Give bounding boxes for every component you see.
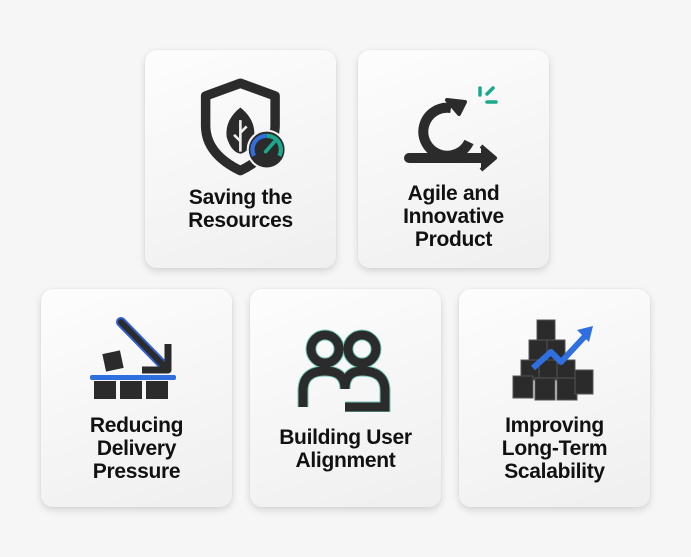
card: Agile and Innovative Product: [358, 50, 549, 268]
icon: cube stack with growth arrow: [512, 320, 594, 400]
text: Delivery: [97, 437, 176, 460]
text: Improving: [505, 414, 604, 437]
text: Alignment: [296, 449, 395, 472]
text: [90, 414, 183, 483]
card: Improving Long-Term Scalability: [459, 289, 650, 507]
icon: agile loop arrow: [404, 86, 498, 172]
text: Building User: [279, 426, 412, 449]
text: Pressure: [93, 460, 180, 483]
text: Long-Term: [502, 437, 607, 460]
text: [403, 182, 504, 251]
card: Building User Alignment: [250, 289, 441, 507]
text: Innovative: [403, 205, 504, 228]
icon: arrow down onto boxes: [90, 317, 176, 399]
text: Product: [415, 228, 492, 251]
icon: shield with leaf and gauge: [200, 78, 285, 176]
text: Reducing: [90, 414, 183, 437]
icon: two users: [298, 330, 390, 412]
text: [279, 426, 412, 472]
text: Agile and: [408, 182, 499, 205]
text: [188, 186, 293, 232]
text: Resources: [188, 209, 293, 232]
text: Saving the: [189, 186, 292, 209]
card: Saving the Resources: [145, 50, 336, 268]
text: Scalability: [504, 460, 605, 483]
text: [502, 414, 607, 483]
card: Reducing Delivery Pressure: [41, 289, 232, 507]
